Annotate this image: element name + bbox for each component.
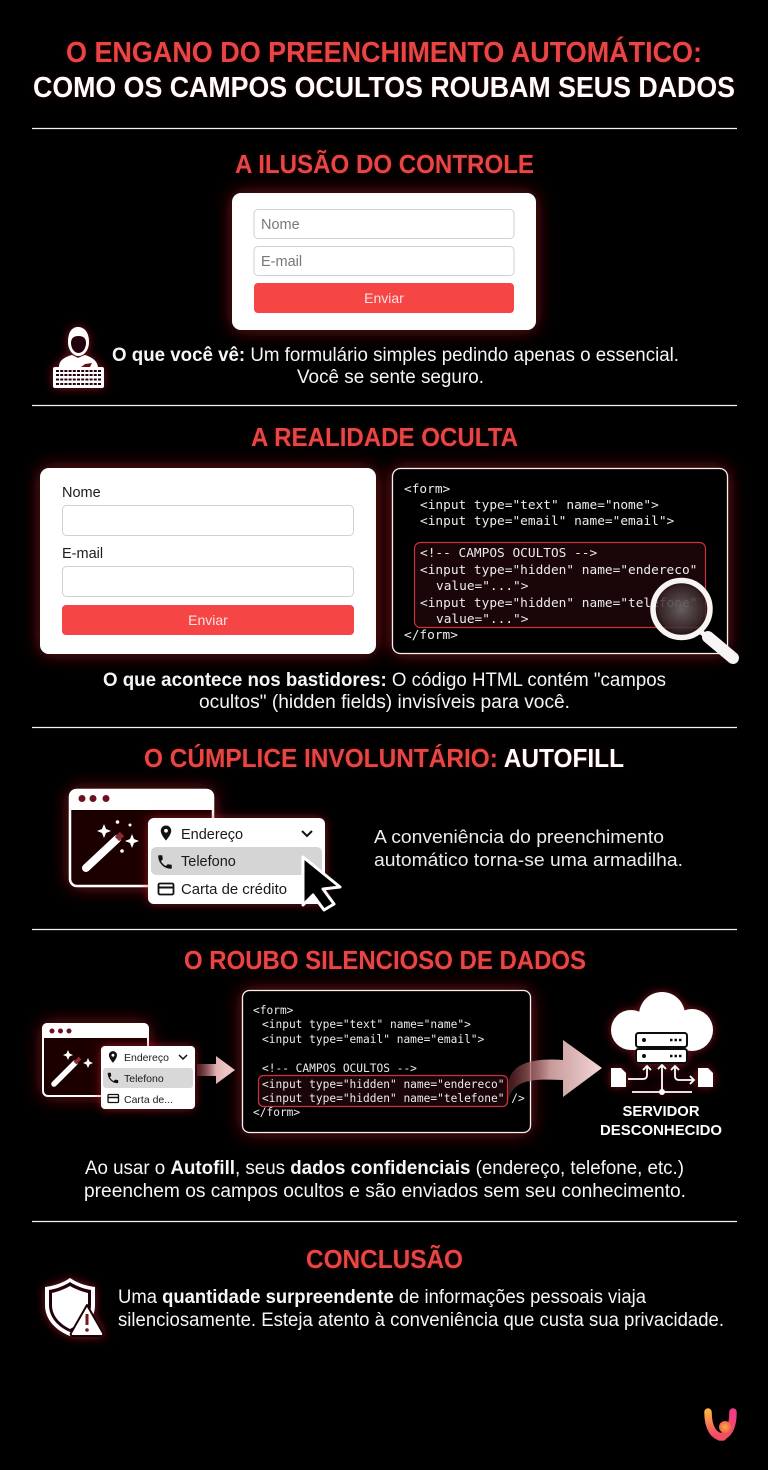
text: conveniência: automático torna-se uma armadilha. [374,850,683,870]
icon: user at keyboard [53,327,104,388]
code panel with hidden fields: <input type="hidden" name="telefone" [420,596,697,611]
icon: cloud server [611,992,713,1095]
code panel with hidden fields: value="..."> [436,612,529,627]
text: o que você vê [112,345,679,388]
autofill dropdown [148,818,325,904]
form card with labels [40,468,376,654]
code panel with hidden fields: <input type="email" name="email"> [420,514,675,529]
code panel with filled hidden fields: <input type="hidden" name="endereco" [262,1078,504,1091]
icon: shield with warning [45,1278,103,1336]
form card with labels: Nome [62,485,101,501]
code panel with filled hidden fields: <!-- CAMPOS OCULTOS --> [262,1062,417,1075]
autofill dropdown: Carta de crédito [181,882,287,898]
text: conclusão: Uma quantidade surpreendente de informações pessoais viaja [118,1287,646,1308]
text: conclusão: silenciosamente. Esteja atento à conveniência que custa sua privacidade. [118,1310,724,1331]
panel: o roubo silencioso de dados [42,945,722,1202]
text: o que você vê: Você se sente seguro. [297,367,484,388]
simple form card: Enviar [364,290,404,306]
text: o que acontece nos bastidores [103,670,666,713]
code panel with hidden fields: <form> [404,482,451,497]
label: servidor desconhecido: SERVIDOR [622,1103,700,1120]
text: o que acontece nos bastidores: ocultos" (hidden fields) invisíveis para você. [199,692,570,713]
panel: o cúmplice involuntário [69,743,683,910]
code panel with filled hidden fields: <input type="email" name="email"> [262,1033,485,1046]
icon: magnifying glass [653,580,733,658]
code panel with filled hidden fields: <form> [253,1004,294,1017]
code panel with hidden fields: </form> [404,628,458,643]
panel: conclusão [45,1244,724,1336]
label: servidor desconhecido [600,1103,722,1139]
code panel with filled hidden fields: </form> [253,1106,300,1119]
code panel with hidden fields [392,468,728,654]
form card with labels: E-mail [62,546,103,562]
code panel with filled hidden fields [242,990,530,1132]
small autofill dropdown [101,1046,195,1109]
form card with labels: Enviar [188,612,228,628]
simple form card [232,193,536,330]
code panel with filled hidden fields: <input type="hidden" name="telefone" /> [262,1092,525,1105]
logo [708,1412,733,1437]
simple form card: Nome [261,217,300,233]
icon: browser window with magic wand [69,789,214,886]
arrow: dropdown to code [197,1056,235,1084]
icon: mouse cursor [303,857,340,910]
text: o que você vê: O que você vê: Um formulário simples pedindo apenas o essencial. [112,345,679,366]
heading: conclusão: CONCLUSÃO [306,1244,463,1274]
heading: o cúmplice involuntário autofill: O CÚMPLICE INVOLUNTÁRIO: AUTOFILL [144,743,624,773]
small autofill dropdown: Telefono [124,1073,164,1085]
text: conveniência [374,827,683,870]
arrow: code to server [508,1040,602,1102]
text: conveniência: A conveniência do preenchimento [374,827,664,847]
autofill dropdown: Endereço [181,827,243,843]
autofill dropdown: Telefono [181,854,236,870]
code panel with filled hidden fields: <input type="text" name="name"> [262,1018,471,1031]
panel: a realidade oculta [40,422,733,713]
title [33,37,735,104]
label: servidor desconhecido: DESCONHECIDO [600,1122,722,1139]
text: ao usar o autofill: preenchem os campos ocultos e são enviados sem seu conhecimento. [84,1181,686,1202]
panel: a ilusão do controle [53,149,679,388]
title: O ENGANO DO PREENCHIMENTO AUTOMÁTICO: [66,37,702,69]
simple form card: E-mail [261,254,302,270]
text: o que acontece nos bastidores: O que acontece nos bastidores: O código HTML contém "campos [103,670,666,691]
heading: a realidade oculta: A REALIDADE OCULTA [251,422,518,452]
small autofill dropdown: Carta de... [124,1094,173,1106]
icon: small browser window with wand [42,1023,149,1096]
text: ao usar o autofill: Ao usar o Autofill, seus dados confidenciais (endereço, telefone, etc.) [85,1158,684,1179]
heading: a ilusão do controle: A ILUSÃO DO CONTROLE [235,149,534,179]
small autofill dropdown: Endereço [124,1052,169,1064]
code panel with hidden fields: value="..."> [436,579,529,594]
code panel with hidden fields: <!-- CAMPOS OCULTOS --> [420,546,597,561]
heading: o roubo silencioso de dados: O ROUBO SILENCIOSO DE DADOS [184,945,586,975]
text: ao usar o autofill [84,1158,686,1202]
title: COMO OS CAMPOS OCULTOS ROUBAM SEUS DADOS [33,72,735,104]
code panel with hidden fields: <input type="text" name="nome"> [420,498,659,513]
code panel with hidden fields: <input type="hidden" name="endereco" [420,563,697,578]
text: conclusão [118,1287,724,1331]
